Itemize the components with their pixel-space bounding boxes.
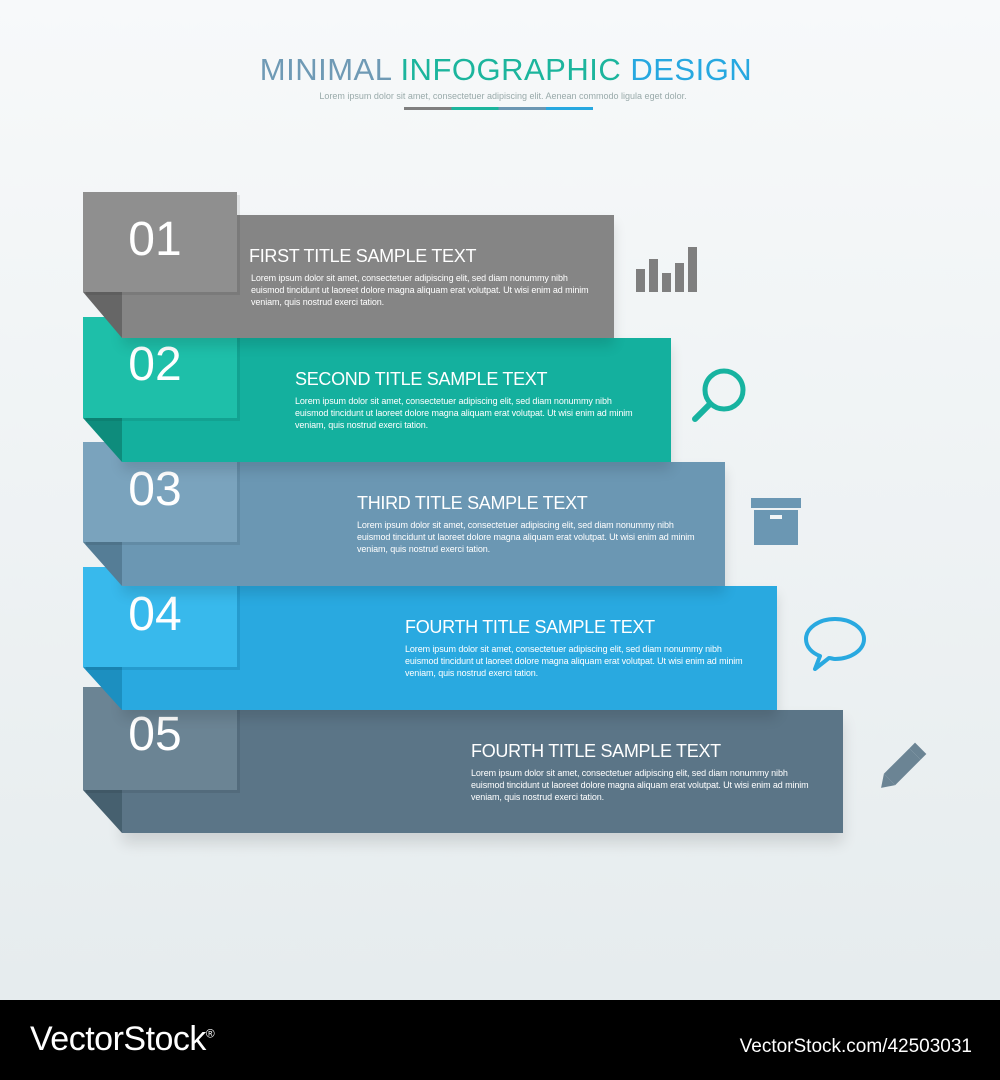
heading 1: FIRST TITLE SAMPLE TEXT — [249, 246, 476, 266]
icon: box — [751, 498, 801, 545]
number 02 — [83, 317, 237, 418]
bar 2 — [122, 338, 671, 462]
body 3: Lorem ipsum dolor sit amet, consectetuer adipiscing elit, sed diam nonummy nibh euismod tincidunt ut laoreet dolore magna aliquam erat volutpat. Ut wisi enim ad minim veniam, quis nostrud exerci tation. — [357, 520, 695, 554]
number 01 — [83, 192, 237, 292]
body 5: Lorem ipsum dolor sit amet, consectetuer adipiscing elit, sed diam nonummy nibh euismod tincidunt ut laoreet dolore magna aliquam erat volutpat. Ut wisi enim ad minim veniam, quis nostrud exerci tation. — [471, 768, 809, 802]
number 02: 02 — [128, 338, 182, 391]
body 4: Lorem ipsum dolor sit amet, consectetuer adipiscing elit, sed diam nonummy nibh euismod tincidunt ut laoreet dolore magna aliquam erat volutpat. Ut wisi enim ad minim veniam, quis nostrud exerci tation. — [405, 644, 743, 678]
heading 4: FOURTH TITLE SAMPLE TEXT — [405, 617, 655, 637]
footer logo: VectorStock® — [30, 1020, 214, 1058]
bar 1 — [122, 215, 614, 338]
row 1 — [83, 192, 618, 350]
bar 5 — [122, 710, 843, 833]
footer band — [0, 1000, 1000, 1080]
number 04: 04 — [128, 588, 182, 641]
heading 3: THIRD TITLE SAMPLE TEXT — [357, 493, 587, 513]
row 3 — [83, 442, 728, 598]
subtitle: Lorem ipsum dolor sit amet, consectetuer adipiscing elit. Aenean commodo ligula eget dolor. — [319, 91, 687, 101]
row 2 — [83, 317, 674, 474]
icon: search — [692, 368, 746, 422]
body 1: Lorem ipsum dolor sit amet, consectetuer adipiscing elit, sed diam nonummy nibh euismod tincidunt ut laoreet dolore magna aliquam erat volutpat. Ut wisi enim ad minim veniam, quis nostrud exerci tation. — [251, 273, 589, 307]
body 2: Lorem ipsum dolor sit amet, consectetuer adipiscing elit, sed diam nonummy nibh euismod tincidunt ut laoreet dolore magna aliquam erat volutpat. Ut wisi enim ad minim veniam, quis nostrud exerci tation. — [295, 396, 633, 430]
icon: speech bubble — [804, 617, 866, 671]
row 4 — [83, 567, 780, 722]
number 01: 01 — [128, 213, 182, 266]
row 5 — [83, 687, 847, 847]
footer url: VectorStock.com/42503031 — [740, 1036, 972, 1057]
title: MINIMAL INFOGRAPHIC DESIGN — [260, 52, 752, 87]
icon: bar chart — [636, 247, 697, 292]
bar 3 — [122, 462, 725, 586]
bar 4 — [122, 586, 777, 710]
title underline — [404, 107, 593, 110]
heading 2: SECOND TITLE SAMPLE TEXT — [295, 369, 547, 389]
number 05 — [83, 687, 237, 790]
number 03 — [83, 442, 237, 542]
number 05: 05 — [128, 708, 182, 761]
number 04 — [83, 567, 237, 667]
icon: pencil — [881, 742, 926, 788]
heading 5: FOURTH TITLE SAMPLE TEXT — [471, 741, 721, 761]
number 03: 03 — [128, 463, 182, 516]
